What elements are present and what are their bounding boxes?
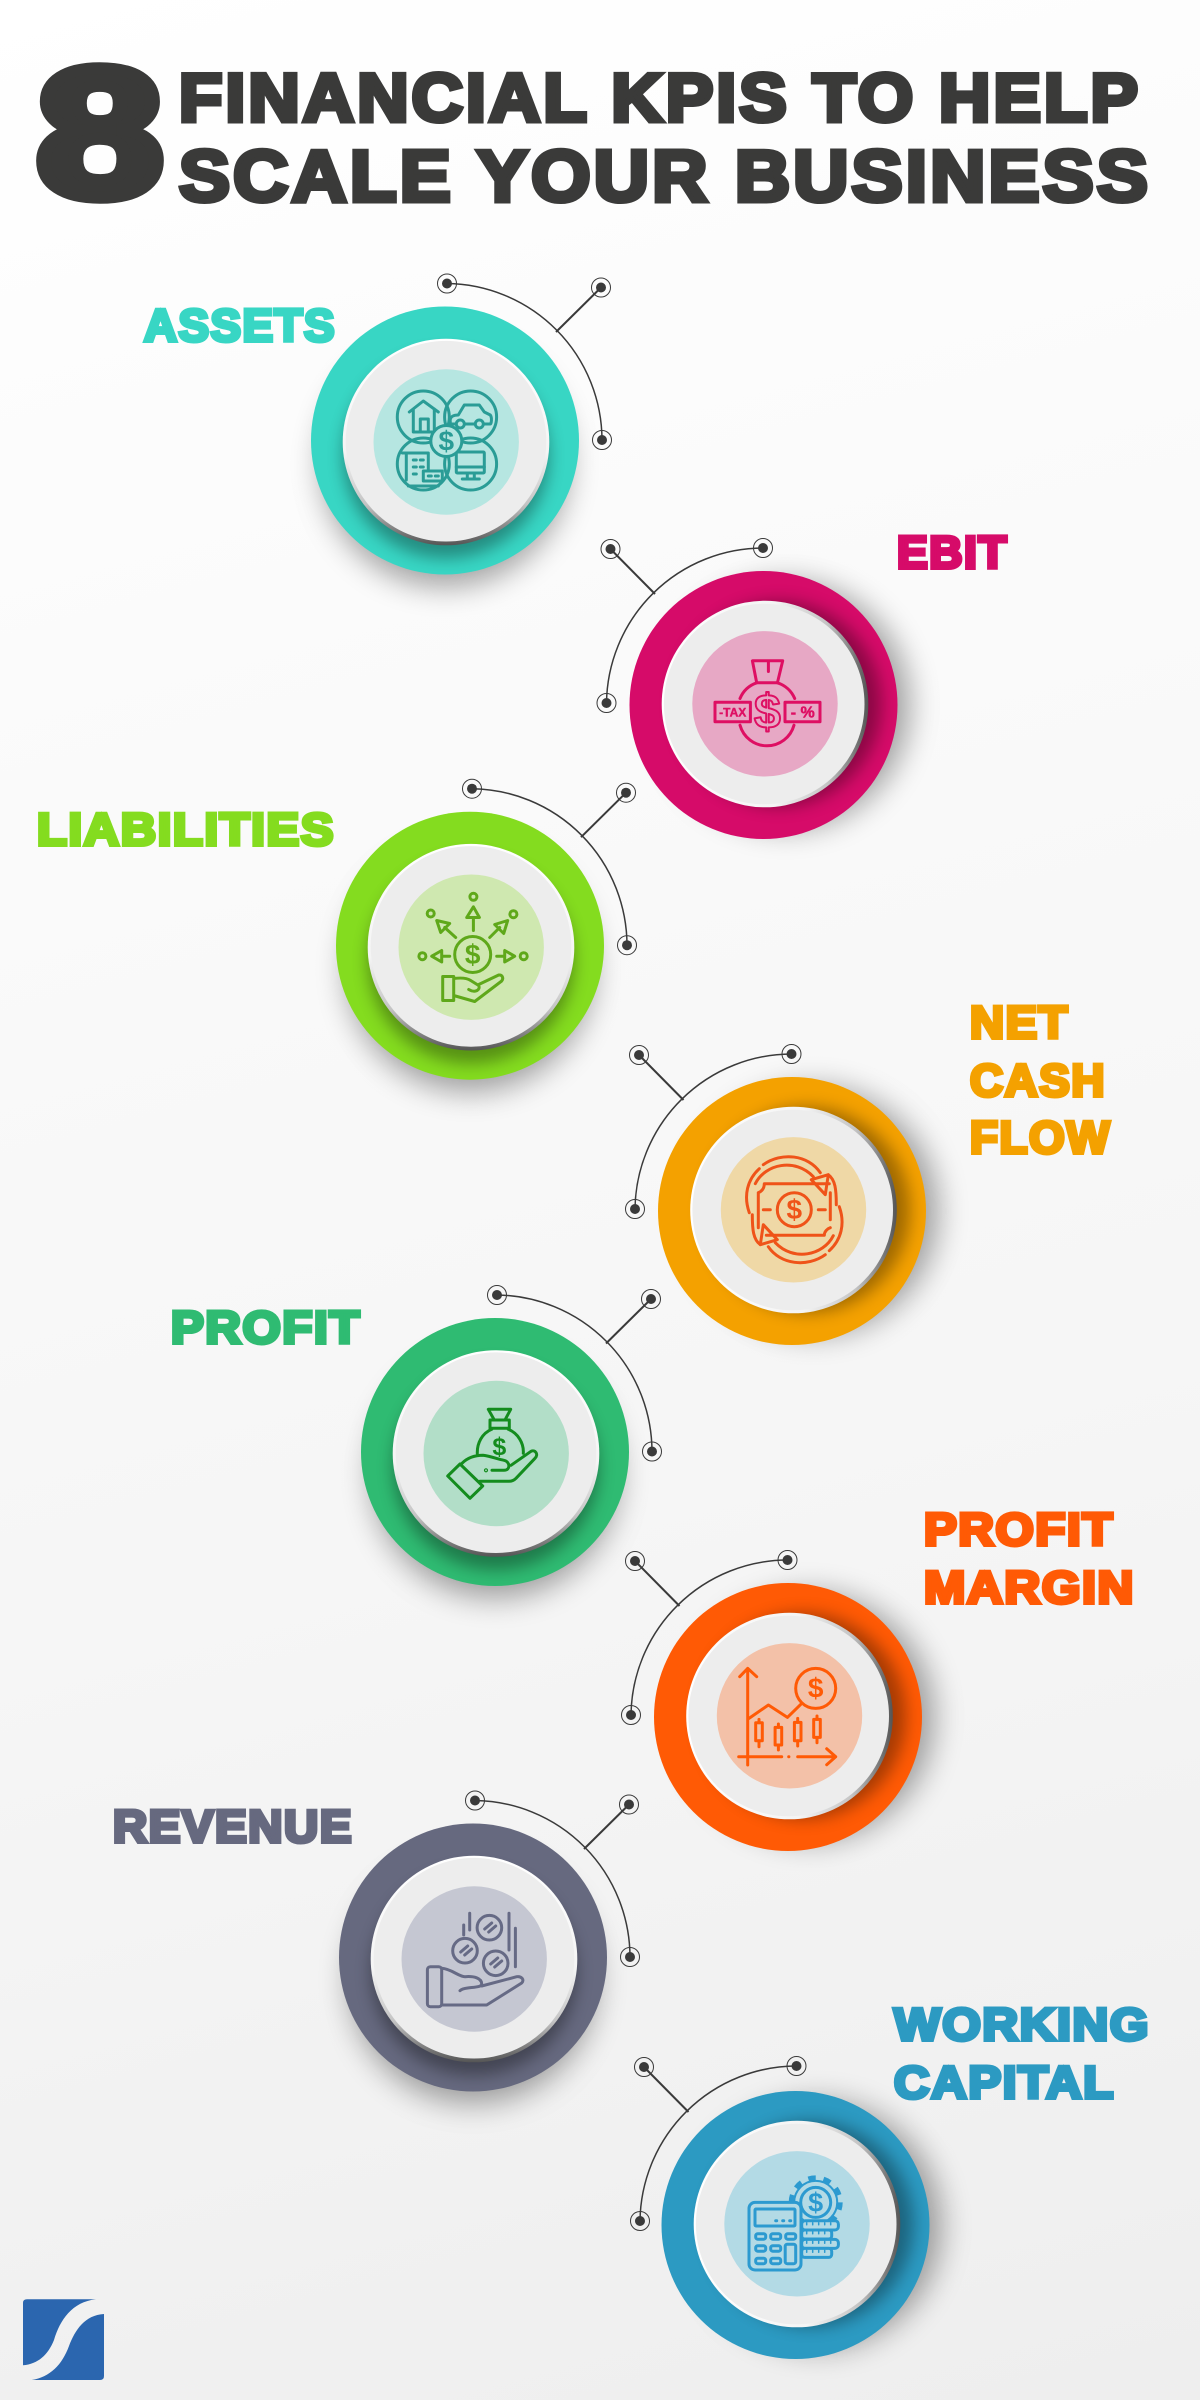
- icon: profit margin: $: [808, 1673, 824, 1704]
- panel: net cash flow: [626, 997, 1111, 1345]
- ring and connector: ebit: [597, 538, 910, 839]
- icon: profit margin: [739, 1668, 836, 1765]
- heading: working capital: WORKING: [894, 1999, 1150, 2050]
- icon: ebit: - %: [791, 704, 815, 722]
- icon: ebit: -TAX: [719, 706, 746, 720]
- heading: net cash flow: [970, 997, 1111, 1163]
- title: [36, 30, 1151, 235]
- icon: working capital: $: [808, 2188, 823, 2218]
- icon: net cash flow: [747, 1157, 842, 1263]
- ring and connector: assets: [311, 274, 612, 586]
- ring and connector: revenue: [339, 1791, 640, 2104]
- ring and connector: profit: [361, 1286, 662, 1598]
- heading: profit margin: PROFIT: [924, 1504, 1114, 1555]
- icon: revenue: [427, 1913, 523, 2007]
- ring and connector: liabilities: [336, 779, 636, 1092]
- heading: working capital: [894, 1999, 1150, 2108]
- panel: profit margin: [622, 1504, 1135, 1851]
- heading: profit margin: MARGIN: [924, 1562, 1135, 1613]
- icon: net cash flow: $: [787, 1194, 803, 1225]
- heading: working capital: CAPITAL: [894, 2057, 1115, 2108]
- heading: net cash flow: CASH: [970, 1055, 1106, 1106]
- icon: profit: [448, 1409, 537, 1498]
- heading: profit: PROFIT: [171, 1302, 361, 1353]
- title line 1: FINANCIAL KPIS TO HELP: [179, 60, 1141, 136]
- panel: liabilities: [37, 779, 636, 1092]
- icon: assets: $: [439, 426, 455, 456]
- icon: liabilities: $: [465, 939, 481, 970]
- panel: profit: [171, 1286, 662, 1598]
- title line 2: SCALE YOUR BUSINESS: [179, 137, 1151, 217]
- heading: assets: ASSETS: [144, 300, 336, 351]
- panel: assets: [144, 274, 612, 586]
- icon: ebit: $: [754, 686, 781, 739]
- title numeral 8: 8: [36, 30, 163, 235]
- panel: working capital: [630, 1999, 1150, 2359]
- panel: ebit: [597, 527, 1008, 839]
- icon: liabilities: [419, 893, 527, 1002]
- heading: ebit: EBIT: [897, 527, 1008, 578]
- heading: liabilities: LIABILITIES: [37, 804, 335, 855]
- panel: revenue: [113, 1791, 640, 2104]
- heading: revenue: REVENUE: [113, 1801, 353, 1852]
- icon: company logo: [23, 2299, 104, 2380]
- ring and connector: profit margin: [622, 1550, 934, 1851]
- ring and connector: net cash flow: [626, 1044, 938, 1345]
- heading: profit margin: [924, 1504, 1135, 1613]
- heading: net cash flow: NET: [970, 997, 1069, 1048]
- heading: net cash flow: FLOW: [970, 1112, 1111, 1163]
- ring and connector: working capital: [630, 2056, 942, 2359]
- icon: ebit: [715, 661, 820, 746]
- icon: working capital: [749, 2178, 840, 2270]
- icon: assets: [397, 391, 497, 490]
- icon: profit: $: [492, 1433, 506, 1461]
